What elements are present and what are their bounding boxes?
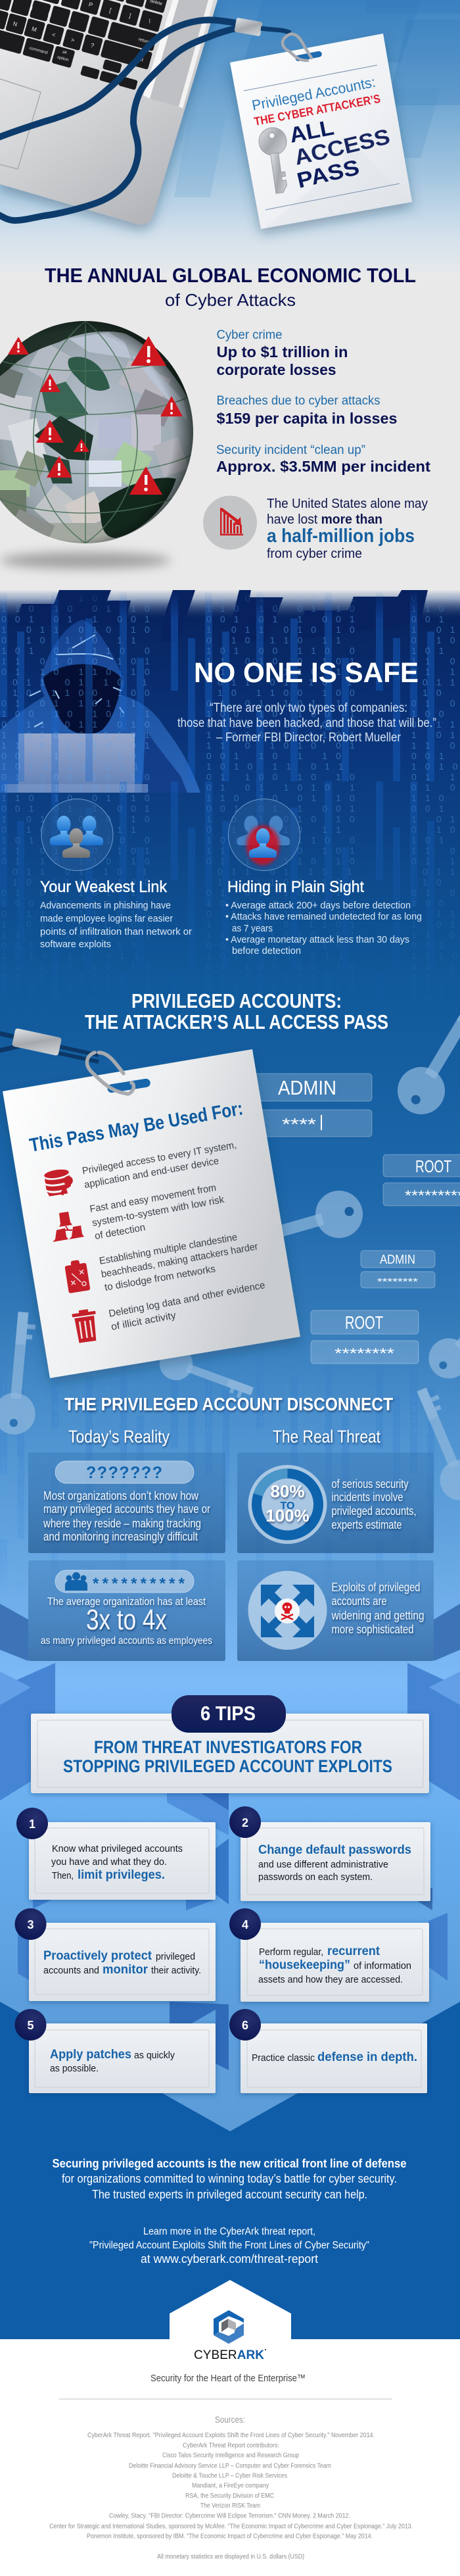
question marks pill: ???????	[86, 1464, 162, 1482]
panel: tips header: FROM THREAT INVESTIGATORS FOR	[94, 1737, 362, 1757]
tip 4: assets and how they are accessed.	[258, 1975, 403, 1985]
icon: logo mark	[214, 2310, 244, 2344]
panel: exploits widening	[237, 1560, 434, 1661]
threat report link: at www.cyberark.com/threat-report	[141, 2252, 318, 2266]
badge clip	[234, 18, 290, 36]
donut chart: 80%	[270, 1481, 305, 1501]
login box: root bottom: ROOT	[345, 1312, 383, 1333]
tagline: Security for the Heart of the Enterprise™	[150, 2373, 306, 2384]
text block: hiding in plain sight: before detection	[232, 945, 301, 956]
tip 6: 6	[242, 2019, 248, 2032]
panel body: Most organizations don’t know how	[43, 1489, 199, 1502]
text block: economic stats: corporate losses	[217, 361, 336, 378]
hero section	[0, 0, 460, 276]
panel body: more sophisticated	[331, 1623, 414, 1636]
text block: your weakest link: software exploits	[40, 939, 111, 950]
heading: no one is safe: NO ONE IS SAFE	[194, 657, 419, 689]
text block: economic stats: Security incident “clean up”	[216, 443, 365, 457]
login box: root top right	[383, 1154, 460, 1206]
list item: deleting log data	[72, 1279, 266, 1343]
heading: the real threat: The Real Threat	[273, 1427, 380, 1447]
panel: most organizations	[28, 1452, 225, 1553]
keyboard	[0, 0, 168, 92]
donut chart: TO	[281, 1500, 294, 1512]
tip 2	[229, 1806, 430, 1901]
text block: economic stats: Breaches due to cyber attacks	[217, 394, 380, 408]
heading: privileged accounts	[85, 989, 388, 1033]
text block: half-million jobs: a half-million jobs	[267, 526, 415, 547]
cyberark logo	[194, 2310, 266, 2362]
keyboard: N	[12, 20, 18, 28]
login box: admin large: ****	[282, 1114, 316, 1134]
keyboard: <	[51, 31, 57, 38]
panel body	[331, 1477, 417, 1531]
sources: Cowley, Stacy. "FBI Director: Cybercrime Will Eclipse Terrorism." CNN Money. 2 March 2012.	[109, 2512, 350, 2519]
chevron strip behind tips	[170, 2002, 229, 2070]
badge title	[250, 74, 392, 193]
badge: 6 tips	[172, 1695, 286, 1733]
laptop	[0, 0, 218, 225]
list item: fast and easy movement	[53, 1182, 225, 1242]
keyboard: ;	[87, 21, 90, 28]
icon: your weakest link people	[41, 799, 113, 871]
hacker figure	[0, 620, 200, 793]
quote	[177, 701, 436, 745]
tip 5: 5	[27, 2019, 34, 2032]
panel: tips header	[31, 1714, 429, 1793]
heading: today's reality: Today’s Reality	[68, 1427, 170, 1447]
tip 5	[14, 2009, 216, 2093]
keyboard: \	[148, 18, 152, 24]
badge title: Privileged Accounts:	[250, 74, 377, 114]
panel body: experts estimate	[331, 1518, 402, 1531]
login box: admin small	[361, 1251, 435, 1288]
panel body: Exploits of privileged	[331, 1581, 421, 1594]
list item: clandestine beachheads	[64, 1231, 259, 1293]
keyboard: alt	[62, 50, 67, 55]
login box: admin large	[237, 1074, 372, 1137]
text block: half-million jobs: The United States alone may	[267, 497, 428, 511]
icon: arrows with skull	[248, 1571, 327, 1650]
icon: hiding in plain sight people	[229, 799, 300, 871]
panel body	[331, 1581, 425, 1636]
text block: your weakest link: Advancements in phishing have	[40, 900, 171, 911]
sources: Sources:	[215, 2414, 245, 2425]
tip 4	[229, 1908, 429, 2002]
tip 3: Proactively protect	[43, 1949, 152, 1963]
sources: The Verizon RISK Team	[200, 2502, 260, 2510]
panel body: of serious security	[331, 1477, 409, 1491]
tip 3: their activity.	[151, 1966, 201, 1976]
login box: admin small: ADMIN	[380, 1253, 415, 1267]
list item: deleting log data: Deleting log data and other evidence	[108, 1279, 266, 1320]
sources: CyberArk Threat Report contributors:	[183, 2442, 279, 2450]
text block: hiding in plain sight: Hiding in Plain Sight	[227, 878, 364, 896]
text block: your weakest link	[40, 878, 192, 950]
tip 5: as possible.	[50, 2064, 99, 2074]
tip 1: 1	[29, 1818, 35, 1831]
list item: clandestine beachheads: Establishing multiple clandestine	[99, 1231, 238, 1267]
badge: 6 tips: 6 TIPS	[200, 1702, 256, 1725]
lanyard	[0, 20, 237, 220]
logo house	[170, 2280, 291, 2340]
people and stars pill	[55, 1570, 194, 1593]
binary code texture	[0, 593, 457, 968]
tip 4: “housekeeping”	[259, 1958, 350, 1972]
keyboard: M	[31, 26, 37, 33]
list item: privileged access: application and end-user device	[83, 1155, 219, 1191]
closing statement: The trusted experts in privileged account security can help.	[92, 2188, 367, 2201]
keyboard: option	[57, 55, 69, 62]
tip 4: 4	[242, 1918, 248, 1931]
keyboard: P	[88, 1, 93, 9]
text block: your weakest link: made employee logins far easier	[40, 913, 173, 924]
keyboard: ?	[90, 42, 95, 49]
cyberark logo: CYBERARK	[194, 2348, 264, 2362]
donut chart	[248, 1465, 327, 1544]
list item: clandestine beachheads: beachheads, making attackers harder	[101, 1241, 259, 1280]
panel body	[41, 1595, 212, 1647]
sources: Mandiant, a FireEye company	[192, 2482, 269, 2490]
panel body	[43, 1489, 210, 1543]
tip 4: recurrent	[327, 1944, 380, 1958]
closing statement: Securing privileged accounts is the new critical front line of defense	[53, 2157, 406, 2170]
text block: half-million jobs: from cyber crime	[267, 547, 362, 561]
tip 3: 3	[27, 1918, 34, 1931]
text block: hiding in plain sight: • Average attack 200+ days before detection	[225, 900, 411, 911]
panel body: where they reside – making tracking	[43, 1517, 201, 1530]
heading: annual global economic toll: of Cyber Attacks	[165, 290, 296, 310]
sources: All monetary statistics are displayed in U.S. dollars (USD)	[157, 2552, 304, 2560]
heading: annual global economic toll: THE ANNUAL GLOBAL ECONOMIC TOLL	[45, 264, 416, 287]
list item: fast and easy movement: system-to-system with low risk	[91, 1194, 225, 1229]
text block: hiding in plain sight: as 7 years	[232, 923, 273, 934]
sources: Cisco Talos Security Intelligence and Research Group	[162, 2452, 299, 2460]
panel title: This Pass May Be Used For:	[28, 1098, 244, 1156]
people and stars pill: **********	[93, 1575, 185, 1593]
closing statement: for organizations committed to winning today’s battle for cyber security.	[62, 2172, 397, 2185]
keyboard: L	[67, 16, 72, 23]
text block: economic stats: $159 per capita in losses	[217, 410, 397, 427]
tip 1: you have and what they do.	[51, 1857, 167, 1868]
text block: half-million jobs	[267, 497, 428, 561]
tip 3: privileged	[156, 1952, 195, 1962]
badge title: PASS	[294, 155, 361, 193]
lanyard and clip for pass panel	[0, 1028, 99, 1062]
top fade	[0, 589, 460, 620]
sources	[49, 2414, 413, 2560]
keyboard: [	[108, 7, 112, 14]
badge title: ACCESS	[292, 124, 392, 170]
footer white area	[0, 2339, 460, 2576]
keyboard: K	[47, 10, 53, 18]
decorative keys	[0, 979, 460, 1506]
keyboard: command	[29, 46, 49, 55]
sources: CyberArk Threat Report. "Privileged Account Exploits Shift the Front Lines of Cyber Security." November 2014.	[87, 2431, 375, 2439]
list item: fast and easy movement: Fast and easy movement from	[89, 1182, 217, 1215]
tip 3	[14, 1908, 216, 2001]
badge title: THE CYBER ATTACKER’S	[253, 92, 381, 128]
panel body: privileged accounts,	[331, 1504, 417, 1518]
keyboard: J	[29, 5, 34, 12]
panel body: as many privileged accounts as employees	[41, 1635, 212, 1647]
text block: economic stats	[216, 328, 430, 475]
keyboard: return	[138, 37, 150, 45]
keyboard: "	[106, 26, 110, 34]
panel: 80% to 100%	[237, 1452, 434, 1553]
tip 1	[16, 1808, 216, 1900]
globe with warning triangles	[0, 316, 197, 569]
heading: privileged accounts: PRIVILEGED ACCOUNTS:	[131, 989, 342, 1012]
threat report link	[89, 2226, 369, 2266]
sources: Deloitte & Touche LLP – Cyber Risk Services	[172, 2472, 287, 2480]
tip 2: passwords on each system.	[258, 1872, 373, 1883]
tip 6	[229, 2009, 427, 2093]
list item: clandestine beachheads: to dislodge from networks	[104, 1263, 216, 1293]
main blue background	[0, 590, 460, 2339]
login box: admin small: ********	[377, 1276, 418, 1287]
tip 2: Change default passwords	[258, 1843, 411, 1857]
panel: 3x to 4x	[28, 1560, 225, 1661]
list item: privileged access	[43, 1139, 237, 1198]
quote: – Former FBI Director, Robert Mueller	[216, 731, 402, 745]
icon: declining chart	[203, 496, 257, 550]
heading: privileged accounts: THE ATTACKER’S ALL ACCESS PASS	[85, 1010, 388, 1033]
heading: the privileged account disconnect: THE PRIVILEGED ACCOUNT DISCONNECT	[64, 1394, 393, 1414]
text block: economic stats: Approx. $3.5MM per incident	[216, 458, 430, 475]
keyboard: shift	[134, 56, 144, 62]
panel body: The average organization has at least	[47, 1595, 206, 1608]
tip 2: and use different administrative	[258, 1860, 388, 1870]
warning triangles	[8, 336, 183, 495]
login box: root bottom: ********	[334, 1345, 395, 1362]
panel body: widening and getting	[331, 1609, 425, 1622]
panel: this pass may be used for	[3, 1049, 300, 1378]
chevron background shapes	[0, 1604, 460, 1981]
pass badge	[230, 34, 412, 229]
heading: annual global economic toll	[45, 264, 416, 310]
skyline of binary code	[14, 590, 428, 641]
closing statement	[53, 2157, 406, 2201]
badge title: ALL	[287, 115, 336, 147]
panel body: incidents involve	[331, 1491, 403, 1504]
text block: your weakest link: Your Weakest Link	[40, 878, 168, 896]
tip 4: of information	[354, 1961, 411, 1971]
list item: deleting log data: of illicit activity	[110, 1310, 177, 1333]
tip 5: Apply patches	[50, 2048, 131, 2062]
question marks pill	[55, 1461, 194, 1483]
panel: tips header: STOPPING PRIVILEGED ACCOUNT EXPLOITS	[63, 1756, 392, 1776]
tip 1: limit privileges.	[78, 1868, 165, 1882]
donut chart: 100%	[265, 1506, 310, 1525]
tip 3: accounts and	[43, 1966, 99, 1976]
text block: hiding in plain sight: • Attacks have remained undetected for as long	[225, 911, 422, 922]
lower blue chevron	[0, 2002, 460, 2339]
keyboard: ]	[128, 12, 131, 19]
tip 2: 2	[242, 1816, 248, 1829]
list item: privileged access: Privileged access to every IT system,	[81, 1139, 237, 1177]
tip 6: Practice classic	[252, 2053, 315, 2064]
threat report link: "Privileged Account Exploits Shift the Front Lines of Cyber Security"	[89, 2240, 369, 2251]
tip 3: monitor	[103, 1963, 149, 1977]
tip 4: Perform regular,	[259, 1947, 323, 1958]
keyboard: >	[70, 36, 76, 43]
tip 1: Know what privileged accounts	[52, 1844, 183, 1854]
login box: root top right: *********	[405, 1187, 460, 1204]
text block: economic stats: Cyber crime	[217, 328, 283, 342]
sources: Deloitte Financial Advisory Service LLP – Computer and Cyber Forensics Team	[129, 2462, 331, 2470]
text block: half-million jobs: have lost more than	[267, 512, 382, 527]
tip 1: Then,	[52, 1871, 74, 1881]
threat report link: Learn more in the CyberArk threat report,	[143, 2226, 315, 2237]
sources: RSA, the Security Division of EMC	[185, 2492, 274, 2500]
panel body: 3x to 4x	[86, 1604, 167, 1636]
text block: your weakest link: points of infiltration than network or	[40, 926, 192, 937]
text block: hiding in plain sight: • Average monetary attack less than 30 days	[225, 934, 409, 945]
sources: Ponemon Institute, sponsored by IBM. "The Economic Impact of Cybercrime and Cyber Espionage." May 2014.	[87, 2532, 373, 2540]
icon: silver key	[257, 126, 294, 195]
login box: admin large: ADMIN	[278, 1076, 336, 1099]
tip 6: defense in depth.	[317, 2050, 417, 2064]
tip 5: as quickly	[134, 2050, 175, 2061]
list item: fast and easy movement: of detection	[94, 1222, 146, 1242]
panel body: accounts are	[331, 1595, 386, 1608]
panel body: many privileged accounts they have or	[43, 1502, 210, 1516]
text block: hiding in plain sight	[225, 878, 422, 956]
text block: economic stats: Up to $1 trillion in	[217, 343, 348, 360]
login box: root bottom	[311, 1310, 419, 1364]
quote: “There are only two types of companies:	[210, 701, 407, 715]
panel body: and monitoring increasingly difficult	[43, 1530, 198, 1543]
